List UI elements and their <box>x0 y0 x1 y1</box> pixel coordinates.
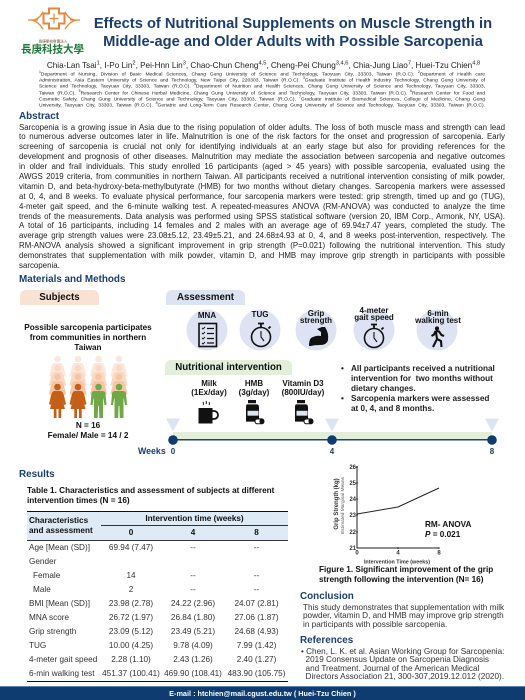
table 1: -- <box>190 571 196 580</box>
label: 6-min walking test: walking test <box>415 316 461 325</box>
label: 4-meter gait speed <box>354 306 394 322</box>
affiliations: Cosmetic Safety, Chang Gung University of Science and Technology, Taoyuan City, 33303, Taiwan (R.O.C). 7 Graduate Institute of Biomedical Sciences, College of Medicine, Chang Gung <box>39 95 485 103</box>
table 1: and assessment <box>29 526 93 535</box>
panel: assessment tab: Assessment <box>177 292 234 303</box>
logo: Chang Gung University of Science and Technology <box>21 8 84 56</box>
label: grip strength: Grip <box>308 309 324 318</box>
conclusion text: powder, vitamin D, and HMB may improve grip strength <box>303 611 504 620</box>
affiliations: University, Taoyuan City, 33303, Taiwan (R.O.C). 8 Geriatric and Long-Term Care Research Center, Chang Gung University of Science and Technology, Taoyuan City, 33303, Taiwan (R.O.C). <box>39 101 485 109</box>
sample size <box>48 421 128 440</box>
subjects description: Taiwan <box>74 343 102 352</box>
table 1: 26.72 (1.97) <box>109 613 153 622</box>
table 1: -- <box>190 543 196 552</box>
label: HMB: HMB <box>245 378 263 388</box>
table 1: Age [Mean (SD)] <box>29 543 90 552</box>
icon: TUG stopwatch <box>240 310 280 350</box>
authors: Chia-Lan Tsai1, I-Po Lin2, Pei-Hnn Lin3, Chao-Chun Cheng4,5, Cheng-Pei Chung3,4,6, Chia-Jung Liao7, Huei-Tzu Chien4,8 <box>47 60 480 70</box>
line chart: grip strength over time <box>334 464 441 565</box>
figure caption <box>319 565 493 584</box>
abstract text: vitamin D, and beta-hydroxy-beta-methylbutyrate (HMB) for two months without dietary changes. Sarcopenia markers were assessed <box>19 182 505 191</box>
abstract text: 4-meter gait speed, and the 6-minute walking test. A repeated-measures ANOVA (RM-ANOVA) was conducted to analyze the time <box>19 202 505 211</box>
label: 4-meter gait speed: 4-meter <box>360 306 388 315</box>
icon: vitamin D3 bottle <box>295 400 313 424</box>
label: vitamin D3: (800IU/day) <box>282 388 324 397</box>
abstract text: average grip strength values were 23.08±5.12, 23.49±5.21, and 24.68±4.93 at 0, 4, and 8 weeks post-intervention, respectively. The <box>19 231 505 240</box>
line chart: grip strength over time: 26 <box>349 465 357 471</box>
table 1: 7.99 (1.42) <box>237 641 276 650</box>
intervention notes: at 0, 4, and 8 months. <box>351 404 434 412</box>
table 1: 24.22 (2.96) <box>171 599 215 608</box>
table 1: Female <box>33 571 60 580</box>
table 1: 4-meter gait speed <box>29 655 97 664</box>
table 1: 26.84 (1.80) <box>171 613 215 622</box>
line chart: grip strength over time: 21 <box>349 546 357 552</box>
label: milk: Milk <box>201 378 217 388</box>
table 1: 23.98 (2.78) <box>109 599 153 608</box>
table 1: 14 <box>126 571 136 580</box>
RM-ANOVA annotation: P = 0.021 <box>425 530 460 539</box>
table 1: -- <box>190 585 196 594</box>
RM-ANOVA annotation: RM- ANOVA <box>425 520 471 529</box>
intervention notes: dietary changes. <box>351 384 416 392</box>
line chart: grip strength over time: 23 <box>349 513 357 519</box>
timeline: Weeks <box>138 446 166 456</box>
figure caption: strength following the intervention (N= 16) <box>319 575 483 584</box>
table 1: 4 <box>191 528 195 537</box>
table 1: 469.90 (108.41) <box>164 669 222 678</box>
heading: references: References <box>300 635 353 646</box>
table 1: 24.07 (2.81) <box>234 599 279 608</box>
pictogram: 16 participants <box>49 356 128 418</box>
intervention notes: Sarcopenia markers were assessed <box>351 394 489 402</box>
line chart: grip strength over time: 0 <box>355 550 359 556</box>
label: grip strength: strength <box>300 316 332 325</box>
icon: gait speed stopwatch <box>354 310 394 350</box>
sample size: Female/ Male = 14 / 2 <box>48 431 128 440</box>
table 1: Intervention time (weeks) <box>145 514 244 523</box>
timeline: 4 <box>330 447 335 456</box>
logo: Chang Gung University of Science and Technology: 長庚學校財團法人 <box>39 38 68 44</box>
label: vitamin D3 <box>282 378 324 397</box>
table 1: 2 <box>129 585 133 594</box>
panel: nutritional intervention tab <box>165 360 292 375</box>
icon: HMB bottle <box>246 400 264 424</box>
table 1: 6-min walking test <box>29 669 95 678</box>
table 1: 27.06 (1.87) <box>234 613 279 622</box>
footer bar: contact email <box>0 686 525 700</box>
icon: grip strength arm <box>296 310 336 350</box>
reference text: 2019 Consensus Update on Sarcopenia Diagnosis <box>306 655 489 664</box>
table 1: 24.68 (4.93) <box>234 627 279 636</box>
reference text: and Treatment. Journal of the American Medical <box>306 664 479 673</box>
line chart: grip strength over time: 8 <box>437 550 441 556</box>
affiliations: Taiwan (R.O.C). 5 Research Center for Chinese Herbal Medicine, Chang Gung University of Science and Technology, Taoyuan City, 33303, Taiwan (R.O.C). 6 Research Center for Food and <box>39 89 485 96</box>
table caption: intervention times (N = 16) <box>27 496 130 505</box>
abstract text: AWGS 2019 criteria, from communities in northern Taiwan. All participants received a nutritional intervention consisting of milk powder, <box>19 172 505 181</box>
panel: subjects tab: Subjects <box>39 292 80 303</box>
abstract text <box>19 122 505 270</box>
label: HMB <box>239 378 269 397</box>
table 1: 69.94 (7.47) <box>109 543 153 552</box>
table 1: 483.90 (105.75) <box>228 669 285 678</box>
heading: results: Results <box>19 469 55 480</box>
subjects description: from communities in northern <box>30 333 146 342</box>
line chart: grip strength over time: Estimated Marginal Means <box>340 477 346 534</box>
conclusion text: in participants with possible sarcopenia. <box>303 620 447 629</box>
affiliations: Science and Technology, Taoyuan City, 33303, Taiwan (R.O.C). 4 Department of Nutrition and Health Sciences, Chang Gung University of Science and Technology, Taoyuan City, 33303, <box>39 82 485 90</box>
label: HMB: (3g/day) <box>239 388 269 397</box>
line chart: grip strength over time: 25 <box>349 481 357 487</box>
title <box>94 16 492 50</box>
abstract text: Sarcopenia is a growing issue in Asia due to the rising population of older adults. The loss of both muscle mass and strength can lead <box>19 122 505 132</box>
title: Middle-age and Older Adults with Possible Sarcopenia <box>103 34 483 50</box>
table 1: 23.09 (5.12) <box>109 627 153 636</box>
intervention notes: • <box>341 394 344 402</box>
abstract text: development and prognosis of other diseases. Malnutrition may mediate the association between sarcopenia and negative outcomes <box>19 152 505 161</box>
table 1: -- <box>254 543 259 552</box>
heading: conclusion: Conclusion <box>300 591 354 602</box>
subjects description: Possible sarcopenia participates <box>24 323 152 332</box>
table 1: 2.40 (1.27) <box>237 655 276 664</box>
table 1: 0 <box>129 528 133 537</box>
timeline: 8 <box>490 447 495 456</box>
panel: nutritional intervention tab: Nutritional intervention <box>175 362 282 373</box>
table 1: BMI [Mean (SD)] <box>29 599 90 608</box>
table 1: 2.28 (1.10) <box>111 655 151 664</box>
icon: MNA checklist <box>186 310 228 350</box>
label: MNA: MNA <box>198 311 216 320</box>
table 1: Gender <box>29 557 56 566</box>
abstract text: demonstrates that supplementation with milk powder, vitamin D, and HMB may improve grip strength in participants with possible <box>19 251 505 260</box>
abstract text: RM-ANOVA analysis showed a significant improvement in grip strength (P=0.021) following the nutritional intervention. This study <box>19 241 505 250</box>
table caption <box>27 486 274 505</box>
table 1: Grip strength <box>29 627 76 636</box>
assessment icons <box>186 310 458 350</box>
table 1: MNA score <box>29 613 69 622</box>
line chart: grip strength over time: Grip Strength (kg) <box>334 478 340 530</box>
table 1: TUG <box>29 641 46 650</box>
label: milk <box>191 378 227 397</box>
reference text <box>301 647 504 681</box>
figure caption: Figure 1. Significant improvement of the grip <box>319 565 493 574</box>
table caption: Table 1. Characteristics and assessment of subjects at different <box>27 486 274 495</box>
timeline <box>138 418 499 456</box>
label: 6-min walking test: 6-min <box>427 309 449 318</box>
abstract text: trends of the measurements. Data analysis was performed using SPSS statistical software (version 20, IBM Corp., Armonk, NY, USA). <box>19 212 505 221</box>
abstract text: to numerous adverse outcomes later in life. Malnutrition is one of the risk factors for the onset and progression of sarcopenia. Early <box>19 132 505 141</box>
title: Effects of Nutritional Supplements on Muscle Strength in <box>94 16 492 32</box>
label: 6-min walking test <box>415 309 461 325</box>
label: grip strength <box>300 309 332 325</box>
table 1: 2.43 (1.26) <box>173 655 213 664</box>
icon: walking person <box>416 310 458 350</box>
table 1: 451.37 (100.41) <box>102 669 160 678</box>
affiliations: Administration, Asia Eastern University of Science and Technology, New Taipei City, 220303, Taiwan (R.O.C). 3 Graduate Institute of Health Industry Technology, Chang Gung University of <box>39 76 485 84</box>
abstract text: at 0, 4, and 8 weeks. To evaluate physical performance, four sarcopenia markers were tested: grip strength, timed up and go (TUG), <box>19 192 505 201</box>
footer bar: contact email: E-mail : htchien@mail.cgust.edu.tw ( Huei-Tzu Chien ) <box>169 689 356 698</box>
table 1: 8 <box>254 528 259 537</box>
logo: Chang Gung University of Science and Technology: 長庚科技大學 <box>21 42 84 56</box>
intervention icons <box>198 400 314 424</box>
subjects description <box>24 323 152 352</box>
intervention notes: • <box>341 364 344 372</box>
line chart: grip strength over time: 22 <box>349 530 357 536</box>
table 1: 23.49 (5.21) <box>171 627 215 636</box>
table 1: 10.00 (4.25) <box>109 641 153 650</box>
panel: subjects tab <box>20 290 99 305</box>
abstract text: A total of 16 participants, including 14 females and 2 males with an average age of 69.94±7.47 years, completed the study. The <box>19 221 505 230</box>
table 1: Characteristics <box>29 516 88 525</box>
abstract text: sarcopenia. <box>19 261 60 270</box>
affiliations: 1 Department of Nursing, Division of Basic Medical Sciences, Chang Gung University of Science and Technology, Taoyuan City, 33303, Taiwan (R.O.C). 2 Department of Health care <box>39 70 485 77</box>
sample size: N = 16 <box>76 421 100 430</box>
icon: coffee mug <box>198 401 218 424</box>
reference text: Directors Association 21, 300-307,2019.12.012 (2020). <box>306 672 504 681</box>
label: milk: (1Ex/day) <box>191 388 227 397</box>
line chart: grip strength over time: Intervention Time (weeks) <box>364 559 430 565</box>
abstract text: in older and frail individuals. This study enrolled 16 participants (aged > 45 years) with possible sarcopenia, evaluated using the <box>19 162 505 171</box>
intervention notes: All participants received a nutritional <box>351 364 495 372</box>
panel: assessment tab <box>166 290 245 305</box>
conclusion text <box>303 603 504 629</box>
heading: materials and methods: Materials and Methods <box>19 274 125 284</box>
affiliations <box>39 70 485 109</box>
heading: abstract: Abstract <box>19 110 59 122</box>
label: vitamin D3: Vitamin D3 <box>282 378 324 388</box>
intervention notes <box>341 364 495 412</box>
table 1: 9.78 (4.09) <box>173 641 213 650</box>
RM-ANOVA annotation <box>425 520 472 539</box>
label: TUG: TUG <box>252 310 268 319</box>
table 1: Male <box>33 585 51 594</box>
abstract text: screening of sarcopenia is crucial not only for identifying individuals at an early stage but also for providing references for the <box>19 142 505 151</box>
table 1 <box>27 511 288 682</box>
reference text: • Chen, L. K. et al. Asian Working Group for Sarcopenia: <box>301 647 504 656</box>
table 1: -- <box>254 585 259 594</box>
table 1: -- <box>254 571 259 580</box>
line chart: grip strength over time: 24 <box>349 497 357 503</box>
label: 4-meter gait speed: gait speed <box>354 313 394 322</box>
line chart: grip strength over time: 4 <box>396 550 400 556</box>
conclusion text: This study demonstrates that supplementation with milk <box>303 603 504 612</box>
timeline: 0 <box>171 447 176 456</box>
intervention notes: intervention for two months without <box>351 374 493 382</box>
